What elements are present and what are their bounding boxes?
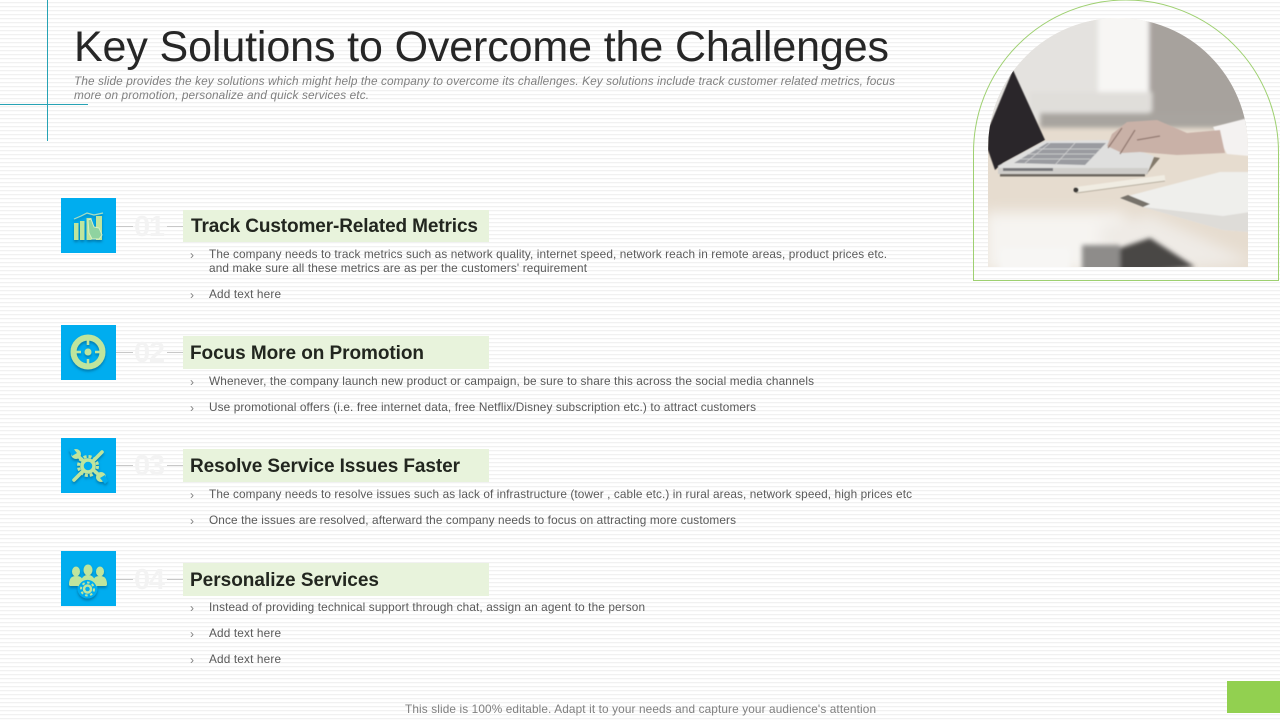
item 4: personalize services: [61, 551, 645, 667]
bullets 4: ›: [190, 601, 194, 615]
number 02: 02: [134, 337, 165, 369]
icon: team with gear: [61, 551, 116, 606]
arch frame: [974, 0, 1278, 280]
corner crosshair accent: [0, 0, 88, 141]
bullets 1: [190, 247, 887, 302]
bullets 2: ›: [190, 401, 194, 415]
item 3: resolve service issues faster: [61, 438, 912, 528]
icon: bar chart: [61, 198, 116, 253]
number 03: 03: [134, 450, 165, 482]
heading 1: [183, 210, 489, 242]
bullets 1: The company needs to track metrics such as network quality, internet speed, network reach in remote areas, product prices etc.: [209, 247, 887, 261]
heading 3: [183, 449, 489, 482]
item 2: focus more on promotion: [61, 325, 814, 415]
subtitle: [74, 74, 895, 102]
bullets 3: Once the issues are resolved, afterward the company needs to focus on attracting more customers: [209, 513, 736, 527]
bullets 3: ›: [190, 514, 194, 528]
heading 3: Resolve Service Issues Faster: [190, 456, 461, 477]
number 04: 04: [134, 564, 165, 596]
heading 2: Focus More on Promotion: [190, 343, 424, 364]
heading 2: [183, 336, 489, 369]
bullets 2: Use promotional offers (i.e. free internet data, free Netflix/Disney subscription etc.) to attract customers: [209, 400, 756, 414]
icon: crossed tools and gear: [61, 438, 116, 493]
title: Key Solutions to Overcome the Challenges: [74, 23, 889, 71]
bullets 2: ›: [190, 375, 194, 389]
heading 4: [183, 563, 489, 596]
bullets 1: Add text here: [209, 287, 281, 301]
green corner block: [1227, 681, 1280, 713]
bullets 1: ›: [190, 288, 194, 302]
subtitle: The slide provides the key solutions which might help the company to overcome its challenges. Key solutions include track customer related metrics, focus: [74, 74, 895, 88]
photo: laptop on desk: [988, 19, 1248, 267]
bullets 4: Add text here: [209, 626, 281, 640]
number 01: 01: [134, 211, 165, 243]
item 1: track customer-related metrics: [61, 198, 887, 302]
bullets 3: [190, 487, 912, 528]
bullets 2: Whenever, the company launch new product or campaign, be sure to share this across the social media channels: [209, 374, 814, 388]
subtitle: more on promotion, personalize and quick services etc.: [74, 88, 369, 102]
bullets 3: ›: [190, 488, 194, 502]
bullets 4: [190, 600, 645, 667]
bullets 4: Add text here: [209, 652, 281, 666]
bullets 1: ›: [190, 248, 194, 262]
bullets 2: [190, 374, 814, 415]
bullets 4: ›: [190, 627, 194, 641]
bullets 4: ›: [190, 653, 194, 667]
bullets 4: Instead of providing technical support through chat, assign an agent to the person: [209, 600, 645, 614]
footer note: This slide is 100% editable. Adapt it to your needs and capture your audience's attention: [405, 702, 876, 716]
bullets 1: and make sure all these metrics are as per the customers' requirement: [209, 261, 588, 275]
heading 1: Track Customer-Related Metrics: [191, 216, 478, 237]
heading 4: Personalize Services: [190, 570, 379, 591]
icon: target: [61, 325, 116, 380]
bullets 3: The company needs to resolve issues such as lack of infrastructure (tower , cable etc.) in rural areas, network speed, high prices etc: [209, 487, 912, 501]
